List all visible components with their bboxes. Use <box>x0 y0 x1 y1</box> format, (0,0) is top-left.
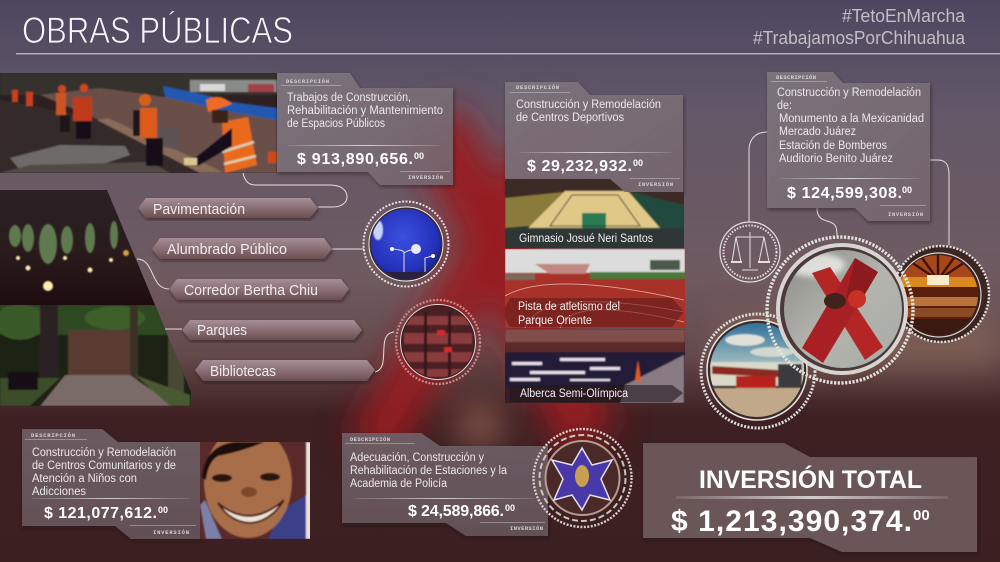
circle: library <box>396 300 480 384</box>
label: descripción: DESCRIPCIÓN <box>516 84 559 91</box>
total amount: 00 <box>913 507 930 524</box>
amount: 00 <box>505 503 515 513</box>
icon: scales of justice <box>720 222 780 282</box>
description text <box>516 99 661 124</box>
photo: running track <box>505 249 685 328</box>
photo: night fountains <box>0 190 160 305</box>
pill: Alumbrado Público <box>152 238 332 259</box>
description text: Auditorio Benito Juárez <box>779 153 893 165</box>
panel: monuments <box>767 72 930 221</box>
description text <box>777 87 924 165</box>
pill: Alumbrado Público: Alumbrado Público <box>167 241 287 258</box>
label: inversión: INVERSIÓN <box>510 525 543 532</box>
pill: Pavimentación <box>138 198 318 218</box>
total amount: $ 1,213,390,374. <box>671 505 912 538</box>
circle: fire station <box>701 314 815 428</box>
description text: de: <box>777 100 792 112</box>
pill: Corredor Bertha Chiu: Corredor Bertha Chiu <box>184 282 318 299</box>
caption: Gimnasio Josué Neri Santos <box>519 233 653 245</box>
photo: pool <box>505 329 685 403</box>
panel: total investment <box>643 443 977 552</box>
label: descripción: DESCRIPCIÓN <box>31 432 75 439</box>
description text: Rehabilitación y Mantenimiento <box>287 105 443 117</box>
amount: $ 124,599,308. <box>787 185 902 202</box>
pill: Bibliotecas: Bibliotecas <box>210 363 276 380</box>
pill: Parques: Parques <box>197 322 247 339</box>
pill: Corredor Bertha Chiu <box>169 279 349 300</box>
description text: Mercado Juárez <box>779 126 856 138</box>
label: inversión: INVERSIÓN <box>408 174 443 181</box>
description text: Atención a Niños con <box>32 473 137 485</box>
amount: 00 <box>633 158 643 168</box>
amount: $ 29,232,932. <box>527 158 632 175</box>
description text: Trabajos de Construcción, <box>287 92 411 104</box>
title rule <box>16 53 1000 54</box>
panel: public spaces <box>277 73 453 185</box>
description text: Monumento a la Mexicanidad <box>779 113 924 125</box>
caption: Alberca Semi-Olímpica <box>520 388 629 400</box>
description text: Rehabilitación de Estaciones y la <box>350 465 508 477</box>
description text: Construcción y Remodelación <box>777 87 921 99</box>
connector lines <box>137 132 949 372</box>
description text: Construcción y Remodelación <box>516 99 661 111</box>
hashtags: #TrabajamosPorChihuahua <box>753 28 966 48</box>
label: descripción: DESCRIPCIÓN <box>776 74 816 81</box>
description text <box>287 92 443 130</box>
amount: 00 <box>158 505 168 515</box>
description text: Estación de Bomberos <box>779 140 887 152</box>
panel: sports centers <box>505 82 683 192</box>
circle: police badge <box>534 429 632 527</box>
label: inversión: INVERSIÓN <box>888 211 923 218</box>
panel: police stations <box>342 433 548 536</box>
description text: Adicciones <box>32 486 86 498</box>
amount: $ 121,077,612. <box>44 505 157 522</box>
amount: $ 24,589,866. <box>408 503 504 520</box>
caption: Pista de atletismo del <box>518 301 620 313</box>
amount: $ 913,890,656. <box>297 151 413 168</box>
description text: Construcción y Remodelación <box>32 447 176 459</box>
photo: park <box>0 304 195 407</box>
label: inversión: INVERSIÓN <box>153 529 189 536</box>
hashtags <box>753 6 966 48</box>
description text <box>350 452 508 490</box>
label: descripción: DESCRIPCIÓN <box>350 436 390 443</box>
label: descripción: DESCRIPCIÓN <box>286 78 329 85</box>
description text: de Espacios Públicos <box>287 118 385 130</box>
description text <box>32 447 176 498</box>
pill: Pavimentación: Pavimentación <box>153 201 245 218</box>
description text: Adecuación, Construcción y <box>350 452 484 464</box>
caption <box>518 301 620 327</box>
pill: Bibliotecas <box>195 360 375 381</box>
description text: Academia de Policía <box>350 478 448 490</box>
photo: gym <box>505 179 685 249</box>
panel: community centers <box>22 429 200 539</box>
title: OBRAS PÚBLICAS <box>22 10 293 51</box>
circle: monument X <box>767 237 913 383</box>
amount: 00 <box>414 151 424 161</box>
heading: inversión total: INVERSIÓN TOTAL <box>699 464 922 494</box>
pill: Parques <box>182 320 362 340</box>
circle: street lights <box>364 202 448 286</box>
description text: de Centros Comunitarios y de <box>32 460 176 472</box>
caption: Parque Oriente <box>518 315 592 327</box>
circle: auditorium <box>893 246 989 342</box>
label: inversión: INVERSIÓN <box>638 181 673 188</box>
hashtags: #TetoEnMarcha <box>842 6 966 26</box>
photo: construction workers <box>0 73 277 173</box>
description text: de Centros Deportivos <box>516 112 624 124</box>
photo: smiling child <box>200 442 310 539</box>
amount: 00 <box>902 185 912 195</box>
